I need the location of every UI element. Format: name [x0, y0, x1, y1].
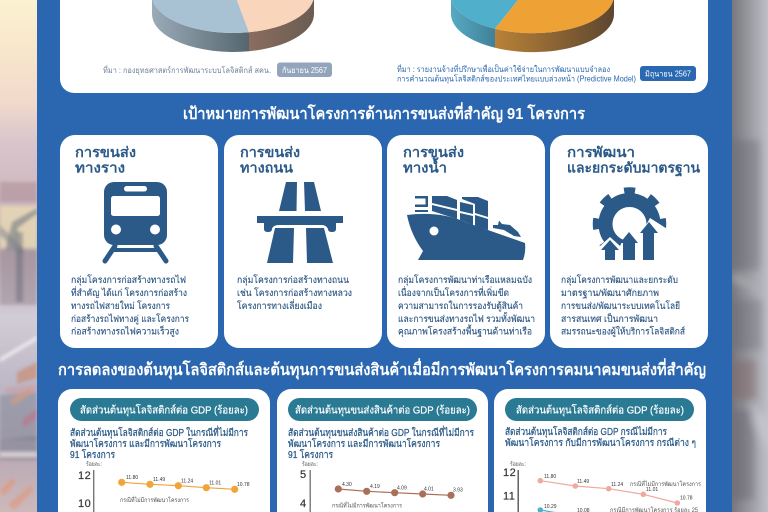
water description: และการขนส่งทางรถไฟ รวมทั้งพัฒนา — [398, 312, 535, 325]
chart subtitle: 91 โครงการ — [70, 448, 116, 461]
road description — [237, 274, 352, 312]
panel: logistics cost share — [58, 389, 270, 512]
pill heading: สัดส่วนต้นทุนโลจิสติกส์ต่อ GDP (ร้อยละ) — [516, 404, 684, 416]
right source note — [397, 63, 636, 84]
rail description: ทางรถไฟสายใหม่ โครงการ — [71, 300, 170, 312]
icon: container ship — [407, 196, 525, 260]
line chart: 11.24 — [611, 482, 623, 488]
rail description — [71, 274, 189, 338]
rail title — [75, 144, 136, 176]
line chart: 11.01 — [646, 487, 658, 493]
line chart: 10.78 — [680, 496, 693, 502]
road title: การขนส่ง — [240, 144, 300, 160]
panel: road transport — [224, 135, 382, 348]
road description: โครงการทางเลี่ยงเมือง — [237, 299, 322, 312]
icon: highway — [257, 182, 343, 263]
chart subtitle: สัดส่วนต้นทุนโลจิสติกส์ต่อ GDP กรณีไม่มีการ — [505, 425, 668, 438]
chart: right pie — [451, 0, 614, 52]
pill heading — [505, 398, 694, 421]
line chart: 4.19 — [370, 484, 380, 490]
water description: กลุ่มโครงการพัฒนาท่าเรือแหลมฉบัง — [398, 274, 532, 286]
line chart: 12 — [503, 467, 516, 479]
right source note: การคำนวณต้นทุนโลจิสติกส์ของประเทศไทยแบบล่วงหน้า (Predictive Model) — [397, 74, 636, 84]
rail description: ก่อสร้างทางรถไฟความเร็วสูง — [71, 324, 179, 338]
line chart: กรณีที่ไม่มีการพัฒนาโครงการ — [120, 496, 190, 504]
line chart: 11.49 — [577, 479, 589, 485]
road title: ทางถนน — [240, 160, 293, 176]
right date badge: มิถุนายน 2567 — [645, 70, 691, 78]
chart subtitle: 91 โครงการ — [288, 448, 334, 461]
standards description — [561, 274, 685, 338]
line chart: 11.80 — [544, 474, 556, 480]
water description: เนื่องจากเป็นโครงการที่เพิ่มขีด — [398, 286, 509, 299]
left source note: ที่มา : กองยุทธศาสตร์การพัฒนาระบบโลจิสติกส์ สคน. — [103, 64, 271, 75]
chart subtitle: พัฒนาโครงการ และมีการพัฒนาโครงการ — [70, 437, 222, 450]
heading: cost reduction: การลดลงของต้นทุนโลจิสติกส์และต้นทุนการขนส่งสินค้าเมื่อมีการพัฒนาโครงการคมนาคมขนส่งที่สำคัญ — [58, 358, 706, 380]
standards title: และยกระดับมาตรฐาน — [567, 160, 700, 178]
line chart: 4.01 — [424, 486, 434, 492]
panel: freight cost share — [277, 389, 488, 512]
chart subtitle — [70, 425, 249, 461]
rail description: ก่อสร้างรถไฟทางคู่ และโครงการ — [71, 313, 189, 325]
water description: ความสามารถในการรองรับตู้สินค้า — [398, 300, 523, 312]
line chart: กรณีที่ไม่มีการพัฒนาโครงการ — [332, 502, 403, 510]
water description — [398, 274, 535, 338]
line chart: 11.49 — [153, 477, 165, 483]
line chart: 3.93 — [453, 488, 463, 494]
line chart: กรณีที่ไม่มีการพัฒนาโครงการ — [630, 480, 702, 488]
standards title: การพัฒนา — [567, 144, 635, 160]
water title: การขนส่ง — [403, 144, 464, 160]
pill heading — [70, 398, 259, 421]
chart: left pie — [152, 0, 314, 52]
heading: 91 projects: เป้าหมายการพัฒนาโครงการด้านการขนส่งที่สำคัญ 91 โครงการ — [183, 102, 585, 124]
road title — [240, 144, 300, 176]
standards description: สารสนเทศ เป็นการพัฒนา — [561, 312, 658, 325]
chart subtitle: พัฒนาโครงการ และมีการพัฒนาโครงการ — [288, 437, 441, 450]
line chart: 11 — [503, 490, 515, 502]
chart subtitle — [288, 425, 475, 461]
standards description: กลุ่มโครงการพัฒนาและยกระดับ — [561, 274, 678, 286]
chart subtitle — [505, 425, 696, 449]
standards title — [567, 144, 700, 178]
panel: water transport — [387, 135, 545, 348]
right date badge — [640, 66, 696, 81]
line chart: 11.24 — [181, 478, 193, 484]
standards description: สมรรถนะของผู้ให้บริการโลจิสติกส์ — [561, 326, 685, 338]
chart subtitle: สัดส่วนต้นทุนขนส่งสินค้าต่อ GDP ในกรณีที่ไม่มีการ — [288, 425, 475, 439]
rail description: ที่สำคัญ ได้แก่ โครงการก่อสร้าง — [71, 286, 187, 299]
rail title: การขนส่ง — [75, 144, 136, 160]
background photo left: port scene — [0, 0, 38, 512]
standards description: การขนส่ง/พัฒนาระบบเทคโนโลยี — [561, 300, 680, 312]
panel: scenario comparison — [494, 389, 706, 512]
line chart: 11.01 — [209, 480, 221, 486]
pill heading: สัดส่วนต้นทุนโลจิสติกส์ต่อ GDP (ร้อยละ) — [80, 404, 248, 416]
right source note: ที่มา : รายงานจ้างที่ปรึกษาเพื่อเป็นค่าใช้จ่ายในการพัฒนาแบบจำลอง — [397, 63, 610, 74]
line chart: 5 — [300, 469, 307, 481]
background photo right: port scene — [732, 0, 768, 512]
icon: gear with arrows — [596, 191, 672, 264]
line chart: 10 — [78, 498, 91, 510]
line chart — [78, 461, 250, 512]
panel: rail transport — [60, 135, 218, 348]
water title: ทางน้ำ — [403, 156, 447, 176]
line chart: ร้อยละ: — [302, 461, 318, 468]
line chart: 10.78 — [237, 482, 250, 488]
road description: เช่น โครงการก่อสร้างทางหลวง — [237, 287, 352, 299]
left date badge: กันยายน 2567 — [282, 66, 327, 75]
line chart: 4 — [300, 498, 307, 510]
standards description: มาตรฐาน/พัฒนาศักยภาพ — [561, 288, 659, 299]
line chart: 11.80 — [126, 475, 138, 481]
panel: standards development — [550, 135, 708, 348]
left date badge — [277, 62, 332, 77]
road description: กลุ่มโครงการก่อสร้างทางถนน — [237, 274, 349, 286]
line chart: 4.30 — [342, 482, 352, 488]
rail title: ทางราง — [75, 160, 125, 176]
icon: train — [104, 182, 167, 261]
line chart: 4.09 — [397, 486, 407, 492]
line chart: ร้อยละ: — [510, 461, 526, 468]
line chart — [300, 461, 463, 512]
line chart: ร้อยละ: — [86, 461, 102, 468]
chart subtitle: พัฒนาโครงการ กับมีการพัฒนาโครงการ กรณีต่าง ๆ — [505, 436, 696, 449]
line chart — [503, 461, 702, 512]
chart subtitle: สัดส่วนต้นทุนโลจิสติกส์ต่อ GDP ในกรณีที่ไม่มีการ — [70, 425, 249, 439]
panel: top pie charts — [60, 0, 708, 93]
water description: คุณภาพโครงสร้างพื้นฐานด้านท่าเรือ — [398, 324, 532, 338]
pill heading: สัดส่วนต้นทุนขนส่งสินค้าต่อ GDP (ร้อยละ) — [295, 404, 470, 416]
water title — [403, 144, 464, 176]
line chart: 12 — [78, 470, 91, 482]
rail description: กลุ่มโครงการก่อสร้างทางรถไฟ — [71, 274, 186, 286]
pill heading — [288, 398, 477, 421]
line chart: 10.29 — [544, 504, 557, 510]
